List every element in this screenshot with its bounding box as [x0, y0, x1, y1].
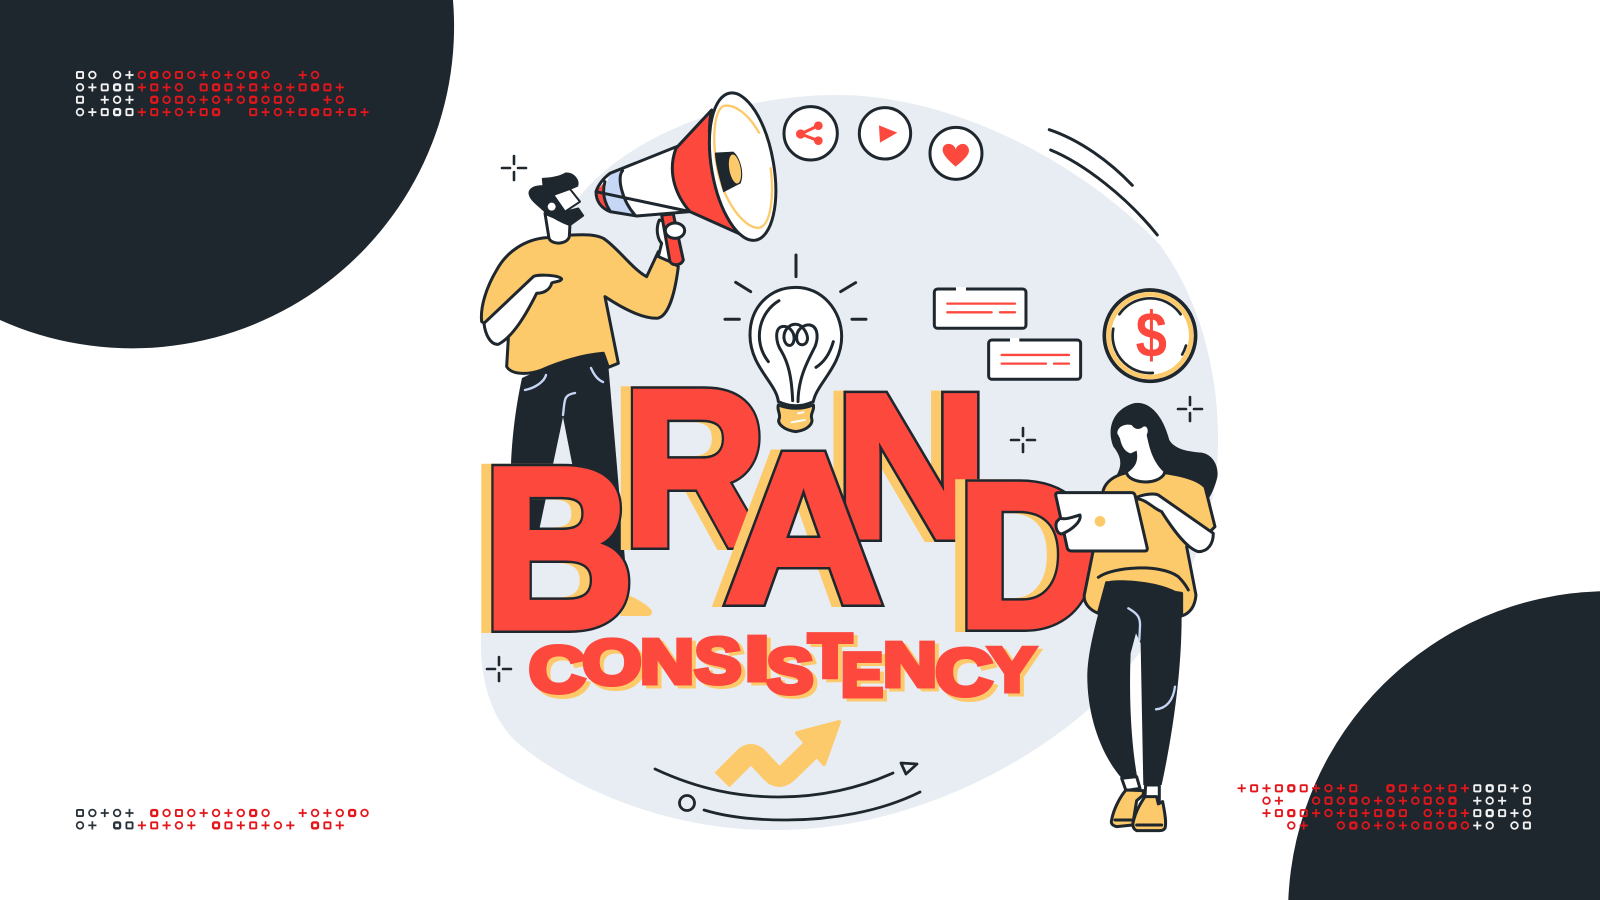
megaphone body fill — [596, 147, 690, 216]
curved lines with markers — [655, 763, 920, 820]
CONSISTENCY shadow layer: N — [887, 633, 941, 703]
CONSISTENCY face layer: I — [745, 624, 769, 693]
megaphone mouth — [699, 88, 786, 246]
man neck — [545, 213, 570, 243]
letter R: R — [622, 344, 767, 592]
megaphone yellow rim — [714, 106, 772, 228]
CONSISTENCY shadow layer: T — [813, 624, 855, 693]
tablet — [1056, 493, 1147, 551]
icon: share — [784, 107, 837, 160]
man arm pointing — [484, 275, 562, 344]
woman face and neck — [1117, 425, 1163, 481]
curved motion lines — [1049, 130, 1157, 235]
woman socks — [1122, 777, 1159, 802]
icon: dollar coin: $ — [1136, 298, 1167, 370]
letter B: B — [482, 419, 635, 676]
sparkles — [487, 156, 1202, 681]
woman hair — [1111, 403, 1218, 502]
growth arrow — [722, 722, 839, 780]
woman front shoe — [1133, 797, 1166, 831]
CONSISTENCY face layer — [529, 621, 1035, 710]
social icons and idea group — [725, 107, 1202, 432]
CONSISTENCY face layer: N — [640, 627, 694, 697]
CONSISTENCY face layer: C — [935, 636, 993, 709]
icon: dollar coin — [1098, 284, 1202, 388]
title: CONSISTENCY — [529, 621, 1039, 713]
CONSISTENCY shadow layer: Y — [993, 639, 1039, 708]
CONSISTENCY face layer: Y — [989, 636, 1035, 705]
CONSISTENCY shadow layer: N — [644, 630, 698, 700]
woman trousers — [1087, 580, 1182, 788]
CONSISTENCY shadow layer: I — [749, 627, 773, 696]
background circle: top left — [0, 0, 454, 348]
symbol pattern: bottom left — [77, 809, 368, 829]
woman shoe soles — [1115, 820, 1162, 825]
letter R: R — [612, 344, 757, 592]
CONSISTENCY shadow layer: C — [533, 638, 589, 710]
CONSISTENCY shadow layer — [533, 624, 1039, 713]
letter B: B — [482, 419, 635, 676]
letter N: N — [835, 353, 988, 581]
figure: man with megaphone — [481, 88, 786, 616]
megaphone driver — [715, 152, 742, 192]
CONSISTENCY face layer: S — [695, 626, 741, 697]
letter R: R — [622, 344, 767, 592]
chat box upper — [934, 289, 1026, 328]
CONSISTENCY shadow layer: S — [771, 639, 817, 710]
woman trouser details — [1128, 608, 1175, 709]
letter A: A — [724, 408, 883, 647]
tablet camera dot — [1095, 516, 1105, 527]
CONSISTENCY shadow layer: C — [939, 640, 997, 713]
megaphone red tip — [596, 182, 610, 211]
CONSISTENCY shadow layer: O — [587, 631, 645, 702]
symbol pattern: top left — [77, 71, 369, 116]
letter D: D — [947, 440, 1089, 671]
letter N: N — [835, 353, 988, 581]
icon: play — [859, 108, 911, 159]
megaphone handle — [662, 214, 683, 265]
woman left hand — [1056, 515, 1080, 534]
symbol pattern: bottom right — [1238, 784, 1530, 830]
chat box lower — [989, 340, 1081, 379]
figure: woman with tablet — [1056, 403, 1218, 831]
letter N: N — [825, 353, 978, 581]
letter D: D — [957, 440, 1099, 671]
CONSISTENCY face layer: T — [809, 621, 851, 690]
CONSISTENCY face layer: S — [767, 636, 813, 707]
megaphone driver cap — [727, 154, 743, 184]
CONSISTENCY face layer: O — [583, 627, 641, 698]
background blob — [481, 95, 1218, 830]
megaphone bell — [672, 110, 740, 234]
megaphone blue band — [605, 170, 635, 215]
man shoe — [620, 595, 652, 616]
woman right arm — [1137, 494, 1213, 552]
CONSISTENCY shadow layer: E — [845, 645, 887, 713]
man face — [553, 189, 580, 212]
background circle: bottom right — [1288, 591, 1600, 900]
letter A: A — [714, 408, 873, 647]
woman shirt hem — [1098, 568, 1188, 590]
title: BRAND — [472, 344, 1099, 676]
CONSISTENCY face layer: N — [883, 630, 937, 700]
CONSISTENCY shadow layer: S — [699, 629, 745, 700]
woman rear shoe — [1111, 790, 1143, 827]
megaphone body outline — [596, 147, 690, 216]
letter A: A — [724, 408, 883, 647]
man shirt — [481, 235, 678, 373]
letter B: B — [472, 419, 625, 676]
CONSISTENCY face layer: C — [529, 634, 585, 706]
icon: heart — [930, 127, 982, 179]
letter D: D — [957, 440, 1099, 671]
man hand on handle — [665, 223, 685, 238]
man trouser details — [525, 368, 603, 415]
man trousers — [511, 350, 625, 560]
megaphone handle back fingers — [657, 220, 673, 262]
CONSISTENCY face layer: E — [841, 642, 883, 710]
icon: light bulb — [725, 255, 866, 432]
woman shirt — [1084, 473, 1215, 616]
man ear — [548, 203, 556, 211]
man hair and beard — [529, 173, 583, 225]
